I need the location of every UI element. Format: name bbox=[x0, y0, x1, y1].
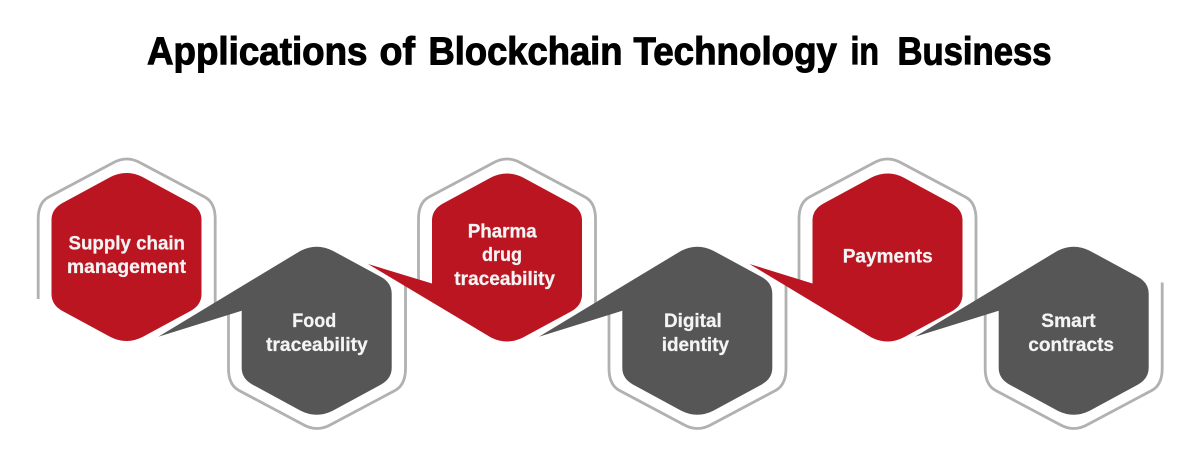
hexagon: Supply chain management: Supply chain bbox=[68, 232, 185, 254]
outline: hexagon 4 bbox=[609, 282, 786, 428]
title: Technology bbox=[634, 31, 838, 74]
hexagon: Food traceability bbox=[158, 247, 392, 415]
hexagon: Digital identity: identity bbox=[662, 334, 729, 356]
hexagon: Payments: Payments bbox=[843, 246, 933, 268]
title: in bbox=[850, 31, 879, 74]
hexagon: Pharma drug traceability: traceability bbox=[454, 268, 555, 290]
hexagon: Supply chain management bbox=[52, 173, 202, 341]
title: Applications bbox=[147, 31, 368, 74]
hexagon: Supply chain management: management bbox=[67, 256, 186, 278]
hexagon: Payments bbox=[750, 174, 962, 342]
hexagon: Food traceability: traceability bbox=[266, 334, 368, 356]
hexagon: Smart contracts: contracts bbox=[1028, 334, 1114, 356]
hexagon: Pharma drug traceability: Pharma bbox=[468, 220, 537, 242]
hexagon: Digital identity bbox=[539, 247, 772, 415]
outline: hexagon 1 bbox=[38, 159, 215, 307]
outline: hexagon 6 bbox=[985, 282, 1162, 428]
outline: hexagon 3 bbox=[418, 159, 596, 307]
outline: hexagon 2 bbox=[228, 282, 406, 428]
hexagon: Pharma drug traceability bbox=[368, 174, 582, 342]
hexagon: Digital identity: Digital bbox=[664, 310, 722, 332]
hexagon: Smart contracts: Smart bbox=[1041, 310, 1096, 332]
title: of bbox=[380, 31, 415, 74]
outline: hexagon 5 bbox=[799, 159, 976, 307]
title: Business bbox=[898, 31, 1052, 74]
hexagon: Pharma drug traceability: drug bbox=[482, 244, 522, 266]
title bbox=[147, 31, 1052, 74]
hexagon: Smart contracts bbox=[915, 247, 1149, 415]
hexagon: Food traceability: Food bbox=[292, 310, 336, 332]
title: Blockchain bbox=[428, 31, 622, 74]
